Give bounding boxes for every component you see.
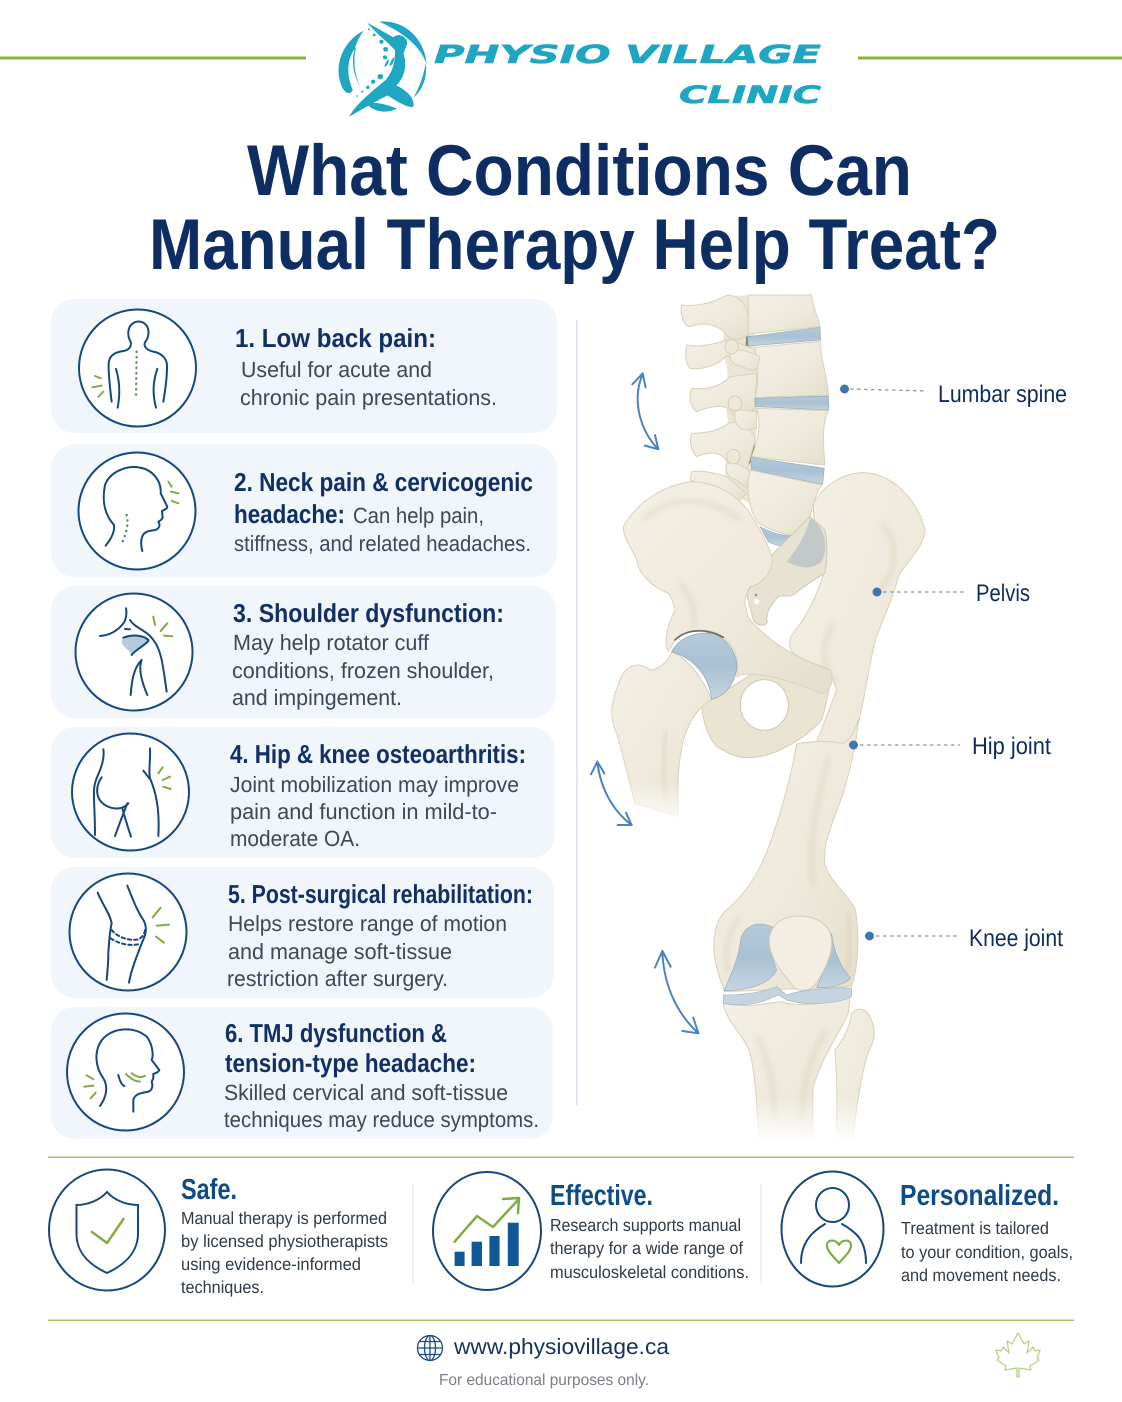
text: effective: Research supports manual bbox=[550, 1215, 741, 1235]
text: safe: using evidence-informed bbox=[181, 1254, 361, 1274]
menisci bbox=[723, 987, 852, 1005]
panel: personalized bbox=[782, 1172, 1073, 1286]
text: safe: Safe. bbox=[181, 1174, 237, 1206]
icon: hip bbox=[72, 734, 189, 850]
text: hip and knee osteoarthritis: Joint mobilization may improve bbox=[230, 772, 519, 797]
transverse processes bbox=[681, 295, 750, 340]
icon: knee with incision bbox=[70, 874, 186, 990]
text: post-surgical rehabilitation: 5. Post-surgical rehabilitation: bbox=[228, 879, 533, 909]
label: hip joint bbox=[849, 733, 1051, 760]
text: low back pain: chronic pain presentations. bbox=[240, 385, 497, 410]
logo wordmark bbox=[434, 40, 822, 109]
right ilium and long bone strip bbox=[790, 473, 925, 837]
obturator ring bbox=[702, 657, 832, 758]
title bbox=[149, 131, 1000, 285]
title: What Conditions Can bbox=[247, 131, 912, 211]
title: Manual Therapy Help Treat? bbox=[149, 205, 1000, 285]
label: pelvis: Pelvis bbox=[976, 580, 1030, 607]
icon: shoulder bbox=[76, 594, 192, 710]
panel: TMJ dysfunction bbox=[51, 1007, 553, 1139]
text: TMJ dysfunction: 6. TMJ dysfunction & bbox=[225, 1018, 447, 1048]
icon: shield with check bbox=[49, 1170, 165, 1290]
hip cartilage bbox=[672, 633, 737, 699]
text: low back pain: 1. Low back pain: bbox=[235, 323, 436, 353]
text: neck pain bbox=[234, 467, 533, 556]
text: shoulder dysfunction: 3. Shoulder dysfunction: bbox=[233, 598, 504, 628]
left ilium bbox=[623, 482, 832, 693]
text: personalized: and movement needs. bbox=[901, 1265, 1061, 1285]
text: personalized bbox=[900, 1180, 1073, 1285]
icon: globe bbox=[418, 1336, 442, 1360]
fade overlays bbox=[613, 780, 690, 827]
icon: person with heart bbox=[782, 1172, 884, 1286]
footer disclaimer: For educational purposes only. bbox=[439, 1372, 649, 1389]
text: effective: musculoskeletal conditions. bbox=[550, 1262, 749, 1282]
icon: jaw bbox=[67, 1014, 184, 1130]
label: lumbar spine bbox=[840, 381, 1067, 408]
text: TMJ dysfunction: techniques may reduce symptoms. bbox=[224, 1107, 539, 1132]
text: effective: Effective. bbox=[550, 1180, 653, 1212]
text: shoulder dysfunction: conditions, frozen shoulder, bbox=[232, 658, 494, 683]
text: personalized: to your condition, goals, bbox=[901, 1242, 1073, 1262]
text: hip and knee osteoarthritis bbox=[230, 739, 526, 851]
motion arrow: hip bbox=[591, 762, 632, 825]
text: shoulder dysfunction: May help rotator cuff bbox=[233, 630, 430, 655]
text: personalized: Personalized. bbox=[900, 1180, 1059, 1212]
label: knee joint bbox=[865, 925, 1063, 952]
panel: post-surgical rehabilitation bbox=[51, 867, 554, 998]
text: safe: techniques. bbox=[181, 1277, 264, 1297]
logo wordmark: PHYSIO VILLAGE bbox=[434, 40, 821, 69]
text: TMJ dysfunction: Skilled cervical and soft-tissue bbox=[224, 1080, 508, 1105]
text: effective: therapy for a wide range of bbox=[550, 1238, 743, 1258]
text: neck pain: headache: bbox=[234, 499, 345, 529]
panel: low back pain bbox=[51, 299, 557, 433]
text: hip and knee osteoarthritis: 4. Hip & knee osteoarthritis: bbox=[230, 739, 526, 769]
logo wordmark: CLINIC bbox=[679, 81, 822, 109]
text: shoulder dysfunction bbox=[232, 598, 504, 710]
text: safe bbox=[181, 1174, 388, 1297]
icon: rising bar chart bbox=[433, 1172, 541, 1290]
logo emblem bbox=[339, 21, 427, 117]
text: neck pain: Can help pain, bbox=[353, 503, 484, 528]
label: knee joint: Knee joint bbox=[969, 925, 1063, 952]
text: TMJ dysfunction bbox=[224, 1018, 539, 1132]
text: safe: Manual therapy is performed bbox=[181, 1208, 387, 1228]
text: hip and knee osteoarthritis: pain and function in mild-to- bbox=[230, 799, 497, 824]
fibula bbox=[835, 1009, 874, 1150]
vertebral bodies bbox=[748, 295, 820, 334]
left femur top bbox=[612, 652, 712, 817]
facet knobs bbox=[730, 350, 760, 371]
text: hip and knee osteoarthritis: moderate OA. bbox=[230, 826, 360, 851]
logo: Physio Village Clinic bbox=[339, 21, 822, 117]
panel: effective bbox=[433, 1172, 749, 1290]
sacrum bbox=[747, 517, 827, 625]
knee cartilage left bbox=[724, 924, 777, 991]
pelvis and lumbar spine bbox=[612, 295, 925, 837]
label: hip joint: Hip joint bbox=[972, 733, 1051, 760]
icon: back and spine bbox=[79, 310, 196, 426]
header rule right bbox=[858, 56, 1122, 60]
knee cartilage right bbox=[817, 933, 851, 987]
label: lumbar spine: Lumbar spine bbox=[938, 381, 1067, 408]
vertebral arch pillar bbox=[722, 295, 758, 503]
text: post-surgical rehabilitation: and manage soft-tissue bbox=[228, 939, 452, 964]
text: post-surgical rehabilitation: Helps restore range of motion bbox=[228, 911, 507, 936]
panel: hip and knee osteoarthritis bbox=[51, 727, 555, 858]
femur and knee bbox=[591, 720, 883, 1151]
femur shaft bbox=[714, 720, 858, 992]
text: neck pain: stiffness, and related headaches. bbox=[234, 531, 531, 556]
text: neck pain: 2. Neck pain & cervicogenic bbox=[234, 467, 533, 497]
panel: safe bbox=[49, 1170, 388, 1297]
panel: shoulder dysfunction bbox=[51, 586, 556, 718]
text: low back pain bbox=[235, 323, 497, 410]
header rule left bbox=[0, 56, 306, 60]
tibia bbox=[723, 995, 850, 1150]
text: TMJ dysfunction: tension-type headache: bbox=[225, 1048, 476, 1078]
text: low back pain: Useful for acute and bbox=[241, 357, 432, 382]
motion arrow: lumbar bbox=[632, 373, 658, 449]
text: shoulder dysfunction: and impingement. bbox=[232, 685, 402, 710]
text: effective bbox=[550, 1180, 749, 1282]
label: pelvis bbox=[872, 580, 1030, 607]
footer website: www.physiovillage.ca bbox=[453, 1334, 670, 1359]
text: safe: by licensed physiotherapists bbox=[181, 1231, 388, 1251]
text: post-surgical rehabilitation bbox=[227, 879, 533, 991]
icon: maple leaf bbox=[996, 1333, 1040, 1377]
motion arrow: knee bbox=[655, 951, 698, 1033]
icon: head and neck bbox=[78, 452, 196, 570]
patella bbox=[769, 916, 832, 990]
text: post-surgical rehabilitation: restriction after surgery. bbox=[227, 966, 448, 991]
panel: neck pain bbox=[51, 444, 557, 577]
anatomy illustration: spine, pelvis, hip and knee bbox=[591, 295, 925, 1151]
text: personalized: Treatment is tailored bbox=[901, 1218, 1049, 1238]
